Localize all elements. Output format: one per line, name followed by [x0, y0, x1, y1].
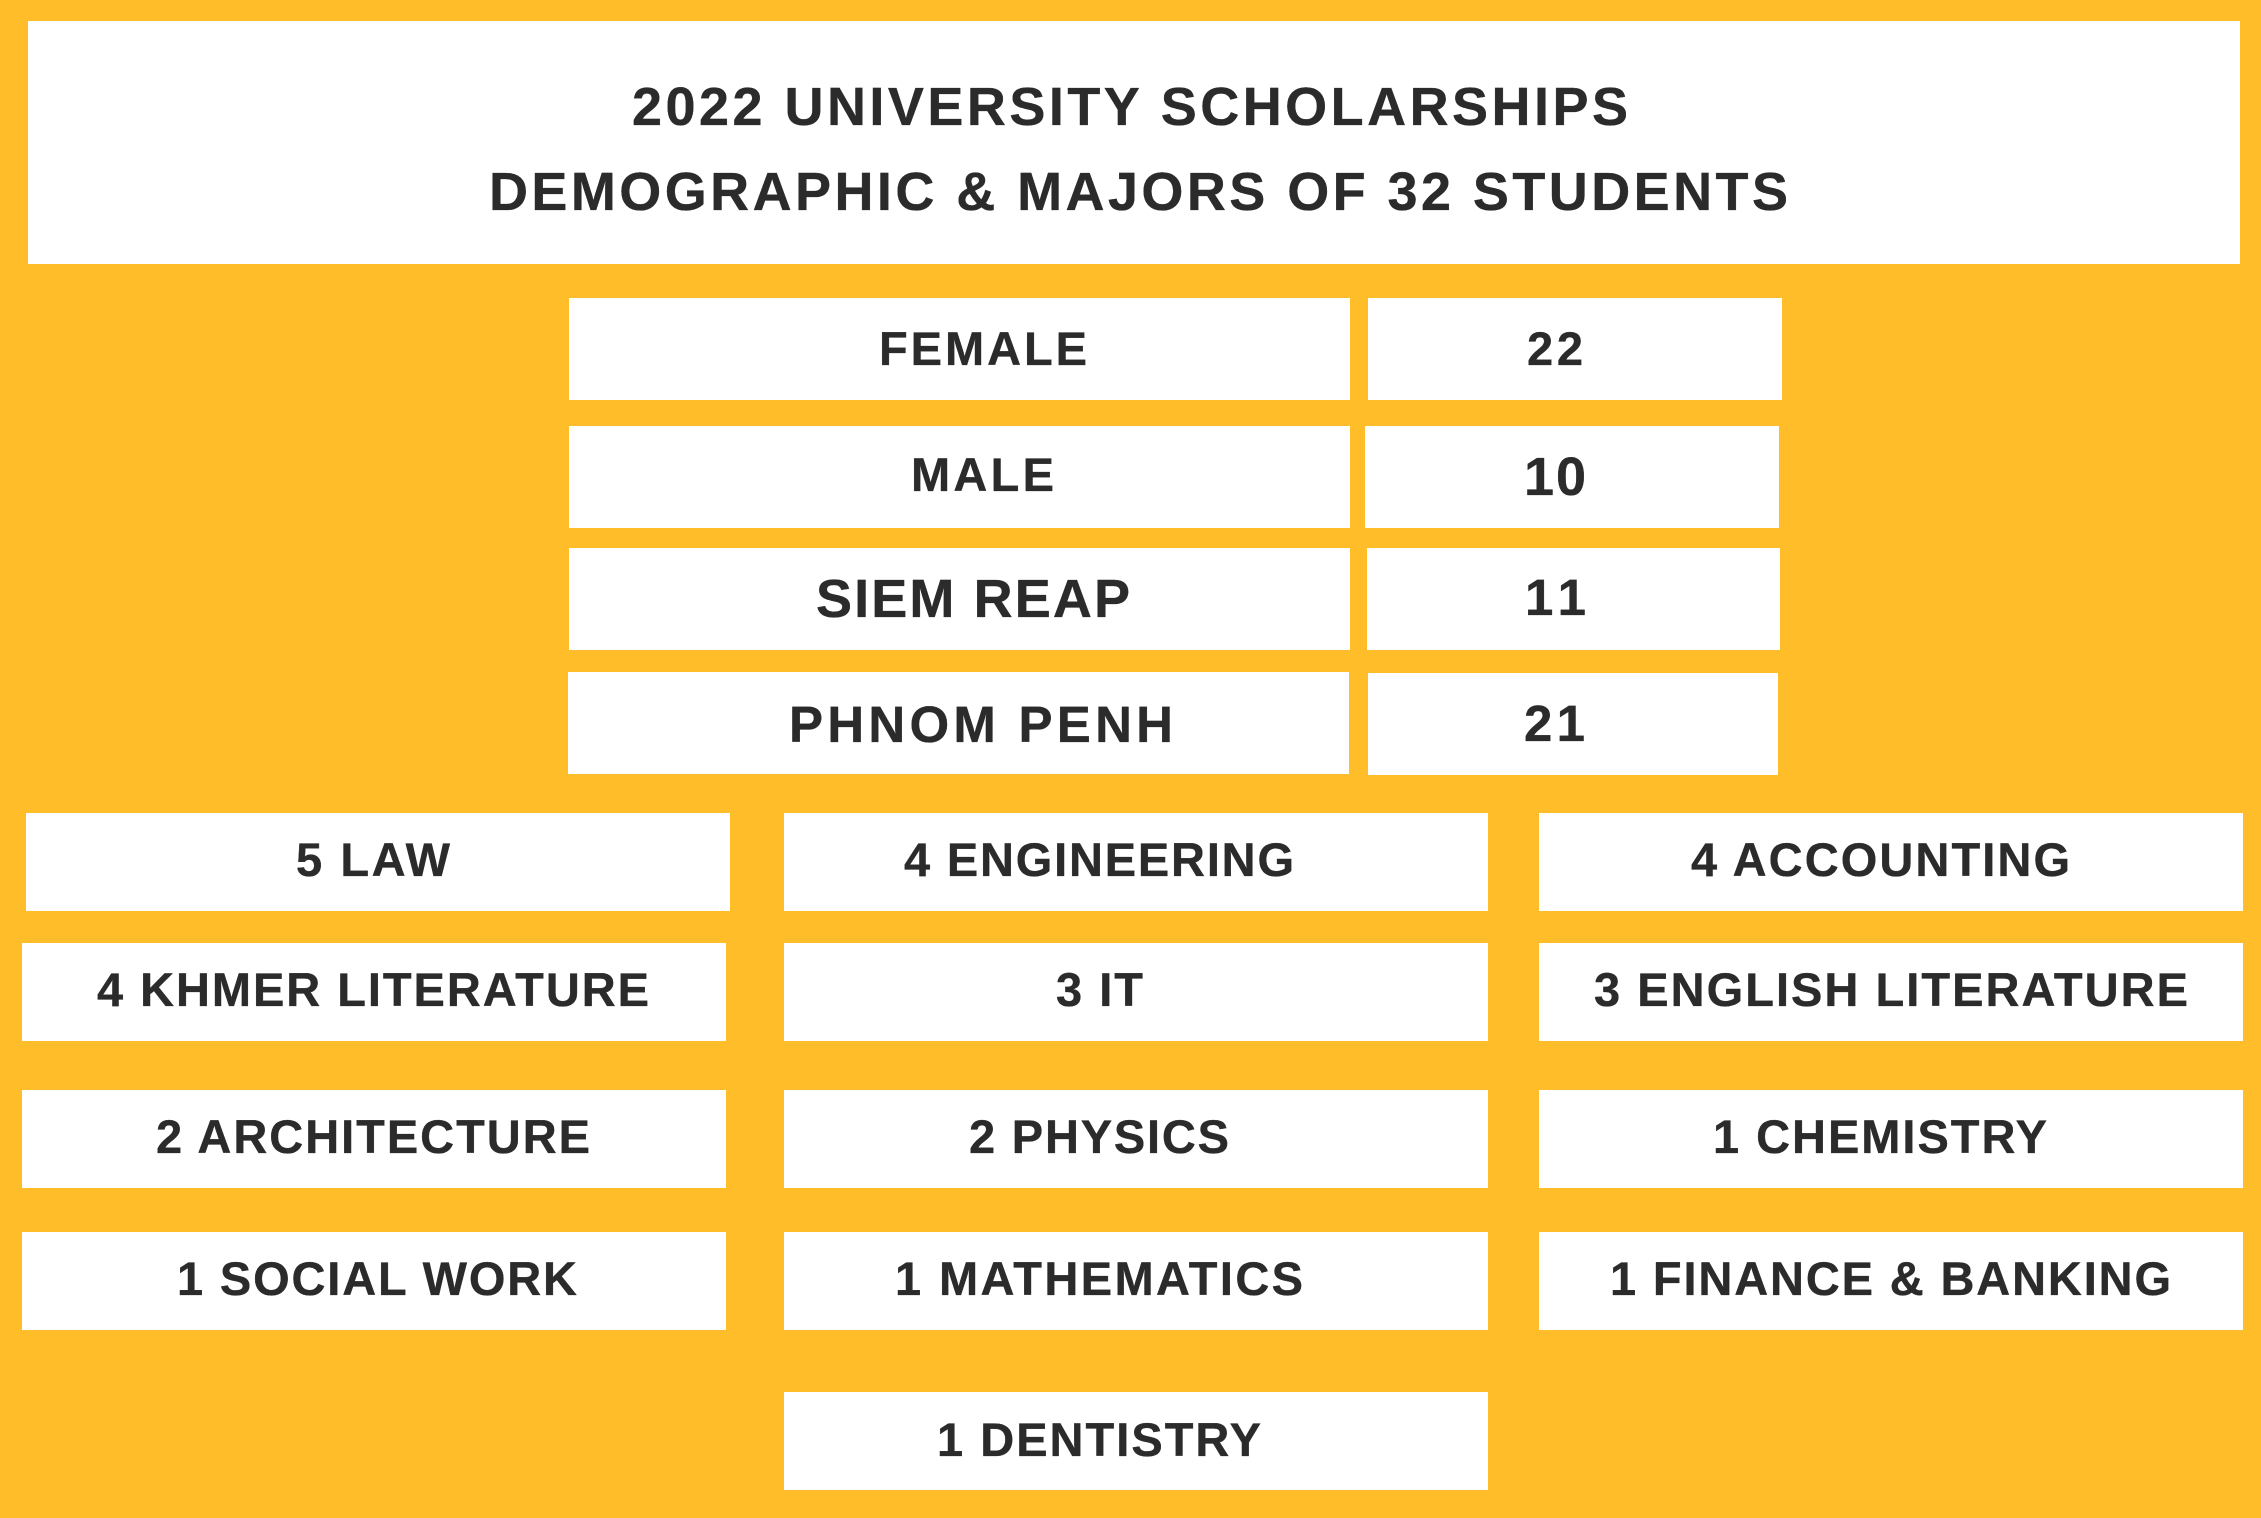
major: law [26, 813, 730, 911]
label: male [569, 426, 1350, 528]
major: physics [784, 1090, 1488, 1188]
title panel [28, 21, 2240, 264]
value: female: 22 [1527, 322, 1583, 375]
value: male [1365, 426, 1779, 528]
major: dentistry: 1 DENTISTRY [937, 1413, 1261, 1466]
label: siem reap [569, 548, 1350, 650]
major: social work [22, 1232, 726, 1330]
title line 1: 2022 UNIVERSITY SCHOLARSHIPS [632, 77, 1628, 137]
label: male: MALE [911, 448, 1054, 501]
major: accounting: 4 ACCOUNTING [1691, 833, 2070, 886]
major: finance and banking [1539, 1232, 2243, 1330]
major: engineering: 4 ENGINEERING [904, 833, 1294, 886]
major: social work: 1 SOCIAL WORK [177, 1252, 577, 1305]
value: siem reap [1367, 548, 1780, 650]
value: male: 10 [1524, 447, 1586, 507]
major: law: 5 LAW [296, 833, 451, 886]
major: finance and banking: 1 FINANCE & BANKING [1610, 1252, 2171, 1305]
value: phnom penh [1368, 673, 1778, 775]
panel: majors [22, 813, 2243, 1490]
major: english literature [1539, 943, 2243, 1041]
major: khmer literature [22, 943, 726, 1041]
major: khmer literature: 4 KHMER LITERATURE [97, 963, 649, 1016]
major: chemistry [1539, 1090, 2243, 1188]
major: accounting [1539, 813, 2243, 911]
value: siem reap: 11 [1525, 569, 1586, 626]
panel: demographics [568, 298, 1782, 775]
major: chemistry: 1 CHEMISTRY [1713, 1110, 2047, 1163]
major: it [784, 943, 1488, 1041]
label: siem reap: SIEM REAP [816, 569, 1130, 629]
major: architecture: 2 ARCHITECTURE [156, 1110, 590, 1163]
label: female [569, 298, 1350, 400]
major: dentistry [784, 1392, 1488, 1490]
major: english literature: 3 ENGLISH LITERATURE [1594, 963, 2188, 1016]
label: phnom penh [568, 672, 1349, 774]
label: female: FEMALE [879, 322, 1087, 375]
value: phnom penh: 21 [1524, 695, 1585, 752]
major: engineering [784, 813, 1488, 911]
label: phnom penh: PHNOM PENH [789, 696, 1173, 753]
major: mathematics: 1 MATHEMATICS [895, 1252, 1303, 1305]
title line 2: DEMOGRAPHIC & MAJORS OF 32 STUDENTS [489, 162, 1788, 222]
value: female [1368, 298, 1782, 400]
major: it: 3 IT [1056, 963, 1143, 1016]
major: physics: 2 PHYSICS [969, 1110, 1229, 1163]
major: architecture [22, 1090, 726, 1188]
major: mathematics [784, 1232, 1488, 1330]
